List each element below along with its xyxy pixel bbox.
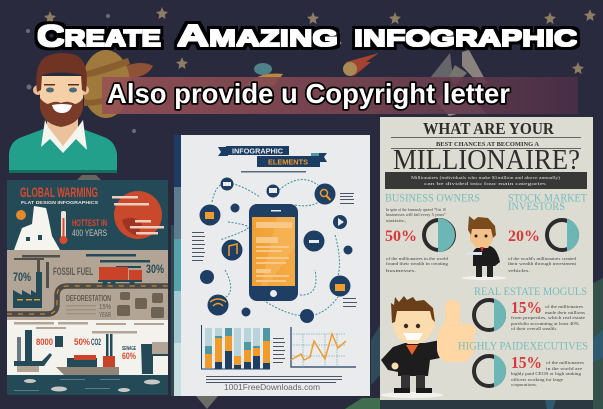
hair (36, 53, 87, 92)
collar (41, 120, 87, 153)
text: stock investors (508, 256, 577, 273)
stat 15% year (99, 304, 111, 319)
eyes (46, 88, 77, 92)
heading highly paid executives: HIGHLY PAIDEXECUTIVES (458, 340, 588, 352)
text executives: in the world are (546, 366, 582, 371)
text: business owners intro: businesses will fail every 5 years" (386, 212, 446, 217)
stat 50% co2: CO2 (91, 337, 101, 347)
deforestation label: DEFORESTATION (66, 293, 111, 303)
poster: infographic elements (174, 135, 370, 396)
tie (406, 345, 418, 355)
road (7, 286, 168, 314)
dark intro box: can be divided into four main categories (424, 181, 546, 186)
stat 15% executives: 15% (511, 353, 542, 372)
legs (401, 375, 410, 389)
text: business owners intro (386, 207, 446, 224)
phone (249, 204, 298, 301)
text: stock investors: of the world's millionaires created (508, 256, 577, 261)
stat 15% real estate: 15% (511, 298, 542, 317)
stat 70%: 70% (13, 270, 31, 284)
text executives: corporations. (511, 382, 537, 387)
heading millionaire: MILLIONAIRE? (393, 145, 580, 176)
poster: global warming (7, 180, 168, 395)
stat 50% with ring: 50% (385, 228, 417, 245)
text: business owners: found their wealth in creating (386, 261, 449, 266)
stat 50% with ring (385, 218, 455, 252)
text real estate: made their millions (545, 310, 585, 315)
title: INFOGRAPHIC (354, 25, 577, 51)
text executives: of the millionaires (546, 360, 584, 365)
text: stock investors: their wealth through investment (508, 261, 577, 266)
heading stock market investors: STOCK MARKET (508, 192, 587, 204)
side colour strip (174, 135, 181, 396)
satellite (430, 50, 487, 116)
text executives: highly paid CEOS or high ranking (511, 371, 582, 376)
ring executives (474, 355, 506, 387)
ribbon heading (218, 146, 327, 167)
dark intro box: Millionaires (individuals who make $1million and above annually) (411, 175, 561, 180)
text: business owners intro: In spite of the famously quoted "9 in 10 (386, 207, 446, 212)
stat 50% co2 (55, 336, 101, 347)
title (37, 18, 577, 53)
dashed connectors (212, 180, 339, 316)
text: stock investors: vehicles. (508, 268, 530, 273)
thumb (437, 300, 476, 362)
stat 30%: 30% (146, 262, 164, 276)
sewage: SEWAGE (122, 346, 136, 352)
tree stumps (117, 292, 164, 318)
decorative stars and planets (26, 7, 596, 133)
sweater (9, 128, 117, 173)
subheading: BEST CHANCES AT BECOMING A (436, 141, 539, 148)
cargo ship (56, 334, 119, 376)
tan band: fossil fuel and deforestation (7, 250, 168, 320)
stat 50% co2: 50% (74, 337, 90, 347)
polar bear on ice (14, 206, 60, 250)
beard (40, 98, 83, 127)
ufo (246, 63, 283, 86)
stat 20% with ring (508, 219, 579, 251)
sewage (122, 342, 168, 374)
suit (381, 340, 440, 376)
oil rig (14, 330, 52, 372)
dark intro box (385, 172, 587, 189)
heading: global warming (20, 184, 98, 205)
line chart (291, 327, 356, 367)
stat 20% with ring: 20% (508, 228, 540, 245)
heading real estate moguls: REAL ESTATE MOGULS (474, 286, 587, 298)
text real estate: from properties, which real estate (511, 315, 585, 321)
text real estate (511, 304, 585, 331)
white band: oil and sewage (7, 320, 168, 376)
small text blocks (192, 193, 357, 307)
text: business owners intro: statistic, (386, 218, 406, 224)
ring real estate (474, 299, 506, 331)
thermometer (60, 211, 68, 244)
heading business owners: BUSINESS OWNERS (385, 192, 480, 204)
text: business owners: of the millionaires in the world (386, 256, 449, 261)
factory (13, 272, 42, 308)
stat 15% year: YEAR (99, 312, 111, 319)
ribbon heading: INFOGRAPHIC (232, 148, 283, 156)
planet mars (112, 191, 164, 239)
avatar: man in green sweater (9, 53, 117, 173)
ears and face (33, 85, 43, 95)
heading: global warming: GLOBAL WARMING (20, 184, 98, 200)
heading stock market investors (508, 192, 587, 213)
bar chart (202, 325, 270, 369)
comet (343, 53, 379, 76)
hottest text (72, 218, 107, 239)
heading stock market investors: INVESTORS (508, 201, 565, 213)
planet (82, 50, 153, 118)
watermark: 1001FreeDownloads.com (224, 382, 320, 392)
head (393, 310, 435, 344)
footer text (206, 376, 342, 383)
text executives: officers working for large (511, 377, 563, 382)
poster: millionaire (380, 117, 593, 400)
stat 15% year: 15% (99, 304, 111, 311)
sewage: 60% (122, 351, 136, 361)
ribbon heading: ELEMENTS (268, 160, 308, 166)
hottest text: 400 YEARS (72, 228, 107, 239)
sea with fish (7, 375, 168, 395)
chart legend text (273, 338, 285, 363)
hottest text: HOTTEST IN (72, 218, 107, 229)
text real estate: portfolio accounting at least 40% (511, 321, 579, 326)
large businessman thumbs up (381, 296, 476, 398)
fossil fuel label: FOSSIL FUEL (53, 266, 93, 278)
heading what are your: WHAT ARE YOUR (423, 119, 555, 138)
truck (98, 267, 142, 286)
small businessman (462, 216, 506, 280)
small caption (241, 171, 306, 172)
heading: global warming: FLAT DESIGN INFOGRAPHICS (21, 200, 98, 205)
title: C REATE (37, 20, 161, 53)
title: A MAZING (177, 18, 338, 53)
circular icons (200, 178, 352, 323)
text real estate: of their overall wealth. (511, 326, 557, 331)
text: business owners (386, 256, 449, 273)
text: business owners: businesses. (386, 268, 416, 273)
icon glyphs (205, 190, 345, 306)
text executives (511, 360, 584, 387)
subtitle: Also provide u Copyright letter (107, 78, 510, 109)
stat 8000: 8000 (36, 337, 53, 347)
text real estate: of the millionaires (545, 304, 583, 309)
banner (102, 77, 578, 114)
